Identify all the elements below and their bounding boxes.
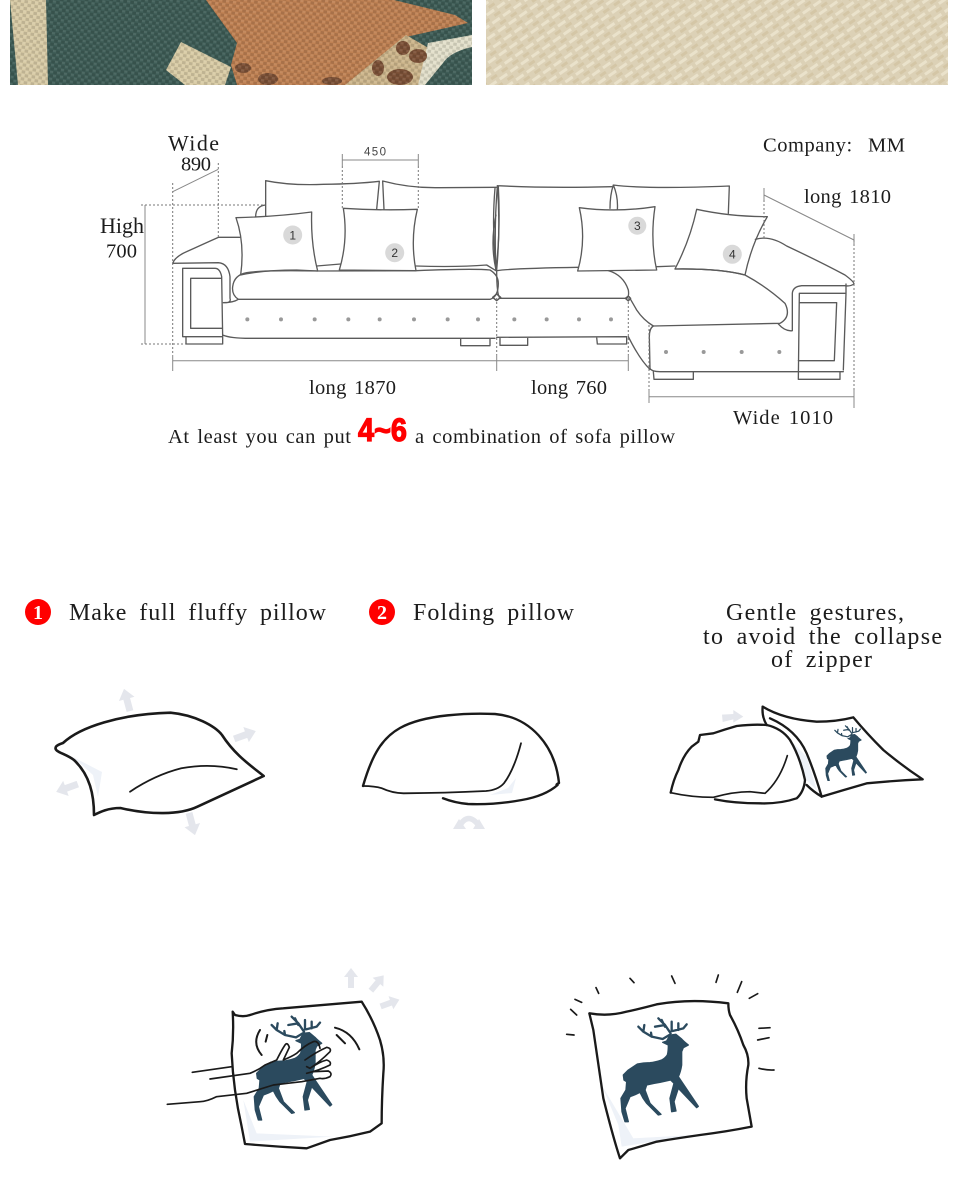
zipper note: to avoid the collapse: [703, 624, 942, 650]
large deer print: [621, 1018, 698, 1122]
pillow number badges: 1: [289, 228, 296, 242]
arrows around pillow: [53, 687, 259, 837]
pillow number badges: 2: [391, 246, 398, 260]
pillow combination caption: [168, 412, 675, 448]
pillow combination caption: At least you can put: [168, 426, 351, 448]
step 2 heading: 2: [377, 602, 387, 624]
zipper note: [703, 600, 942, 673]
sofa diagram: [141, 147, 854, 408]
width 450 label: 450: [364, 147, 386, 159]
fabric swatch: plain linen: [486, 0, 948, 85]
dimension labels: Wide 1010: [733, 407, 833, 429]
dimension labels: 700: [106, 241, 137, 263]
dimension labels: 890: [181, 154, 211, 176]
hand: [167, 1028, 359, 1104]
large deer print under hand: [254, 1017, 332, 1120]
pillow combination caption: a combination of sofa pillow: [415, 426, 675, 448]
step 2 heading: Folding pillow: [413, 600, 575, 626]
dimension lines: [141, 154, 854, 408]
illustration: patting pillow with hand: [167, 968, 402, 1148]
pillow number badges: 3: [634, 219, 641, 233]
arrow toward pillow: [722, 710, 743, 723]
dimension labels: long 1870: [309, 377, 396, 399]
small deer print: [826, 726, 867, 781]
zipper note: of zipper: [771, 647, 872, 673]
illustration: fluffing pillow: [53, 687, 264, 837]
illustration: finished pillow: [567, 975, 774, 1158]
zipper note: Gentle gestures,: [726, 600, 904, 626]
illustration: folding pillow: [363, 714, 559, 829]
step 1 heading: 1: [33, 602, 43, 624]
dimension labels: Wide: [168, 131, 219, 156]
pillow number badges: [283, 217, 742, 264]
illustration: folding pillow with zipper note: [671, 707, 923, 803]
sofa left section: [173, 181, 501, 346]
arrows above pillow: [344, 968, 402, 1013]
dimension labels: [100, 131, 905, 429]
folding arrows: [453, 818, 485, 829]
dimension labels: Company: MM: [763, 135, 905, 157]
dimension labels: long 1810: [804, 186, 891, 208]
sofa right section with chaise: [493, 185, 854, 379]
dimension labels: High: [100, 213, 144, 238]
step 1 heading: Make full fluffy pillow: [69, 600, 327, 626]
pillow number badges: 4: [729, 248, 736, 262]
pillow combination caption: 4~6: [358, 412, 407, 448]
dimension labels: long 760: [531, 377, 607, 399]
fabric swatch: printed burlap: [10, 0, 472, 85]
